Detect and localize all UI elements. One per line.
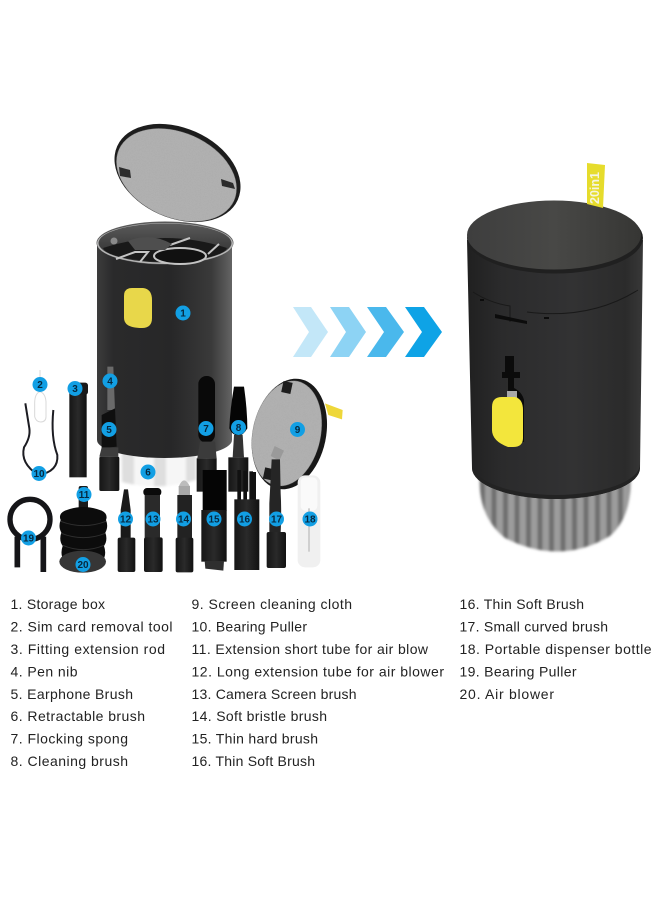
parts list: column 2: 12. Long extension tube for air blower (192, 664, 444, 680)
parts list: column 3 (460, 596, 652, 702)
accessories (10, 367, 343, 573)
number badges: 12 (120, 514, 131, 526)
dispenser bottle (298, 475, 320, 567)
number badges: 17 (271, 514, 282, 526)
soft bristle brush (176, 480, 193, 572)
parts list: column 2: 16. Thin Soft Brush (192, 753, 315, 769)
number badges: 7 (203, 424, 209, 435)
parts list: column 2: 13. Camera Screen brush (192, 686, 356, 702)
bearing puller 10 (23, 403, 57, 475)
parts list: column 1 (10, 596, 172, 769)
yellow 20in1 tab (587, 163, 605, 208)
parts list: column 1: 2. Sim card removal tool (10, 618, 172, 634)
number badges: 16 (239, 514, 250, 526)
number badges: 10 (33, 469, 45, 480)
parts list: column 1: 1. Storage box (10, 596, 105, 612)
number badges: 5 (106, 425, 112, 436)
parts list: column 2: 15. Thin hard brush (192, 730, 318, 746)
parts list: column 3: 18. Portable dispenser bottle (460, 641, 652, 657)
parts list: column 2 (192, 596, 444, 769)
number badges: 14 (178, 514, 189, 526)
number badges: 11 (79, 490, 90, 501)
number badges: 9 (295, 425, 301, 436)
number badges (21, 306, 318, 572)
direction chevrons (293, 307, 442, 357)
yellow 20in1 tab: 20in1 (588, 172, 602, 204)
number badges: 4 (107, 376, 113, 388)
thin hard brush (201, 470, 227, 571)
parts list: column 3: 19. Bearing Puller (460, 664, 577, 680)
folded yellow cloth tab (325, 403, 343, 419)
storage box (96, 222, 234, 458)
parts list: column 1: 7. Flocking spong (10, 730, 128, 746)
number badges: 15 (208, 514, 220, 526)
number badges: 20 (77, 560, 89, 571)
long extension tube (118, 489, 135, 572)
yellow slider (124, 288, 152, 328)
parts list: column 1: 5. Earphone Brush (10, 686, 133, 702)
seam and card slot (473, 290, 638, 322)
parts list: column 1: 4. Pen nib (10, 664, 78, 680)
retractable brush bristles (120, 445, 196, 487)
number badges: 6 (145, 468, 151, 478)
slider slot (500, 356, 524, 442)
number badges: 8 (236, 423, 242, 434)
cleaning brush (228, 387, 248, 492)
number badges: 2 (37, 380, 43, 391)
fitting extension rod (69, 383, 88, 477)
yellow slider (492, 397, 523, 447)
flocking sponge (197, 376, 217, 492)
parts list: column 2: 14. Soft bristle brush (192, 708, 327, 724)
parts list: column 2: 9. Screen cleaning cloth (192, 596, 352, 612)
closed kit body (467, 240, 643, 499)
number badges: 19 (23, 534, 34, 544)
bearing puller 19 (10, 499, 50, 572)
parts list: column 3: 16. Thin Soft Brush (460, 596, 584, 612)
pen nib and earphone brush (99, 367, 119, 491)
closed cleaning kit (467, 163, 643, 552)
screen cleaning lid (99, 105, 256, 241)
parts list: column 3: 20. Air blower (460, 686, 554, 702)
thin soft brush (234, 470, 259, 570)
air blower (59, 486, 107, 573)
parts list: column 1: 6. Retractable brush (10, 708, 145, 724)
parts list: column 1: 8. Cleaning brush (10, 753, 128, 769)
parts list: column 2: 11. Extension short tube for air blow (192, 641, 429, 657)
number badges: 18 (304, 514, 316, 526)
closed kit bristles (480, 470, 631, 552)
small curved brush (267, 446, 286, 568)
cleaning cloth disc (242, 372, 337, 496)
parts list: column 1: 3. Fitting extension rod (10, 641, 165, 657)
sim card removal tool (35, 370, 46, 422)
number badges: 1 (180, 308, 186, 320)
parts list: column 3: 17. Small curved brush (460, 618, 608, 634)
closed kit lid (467, 202, 643, 274)
camera screen brush (143, 488, 163, 572)
number badges: 3 (72, 384, 78, 395)
inner compartments (116, 238, 219, 264)
number badges: 13 (147, 514, 159, 526)
parts list: column 2: 10. Bearing Puller (192, 618, 307, 634)
